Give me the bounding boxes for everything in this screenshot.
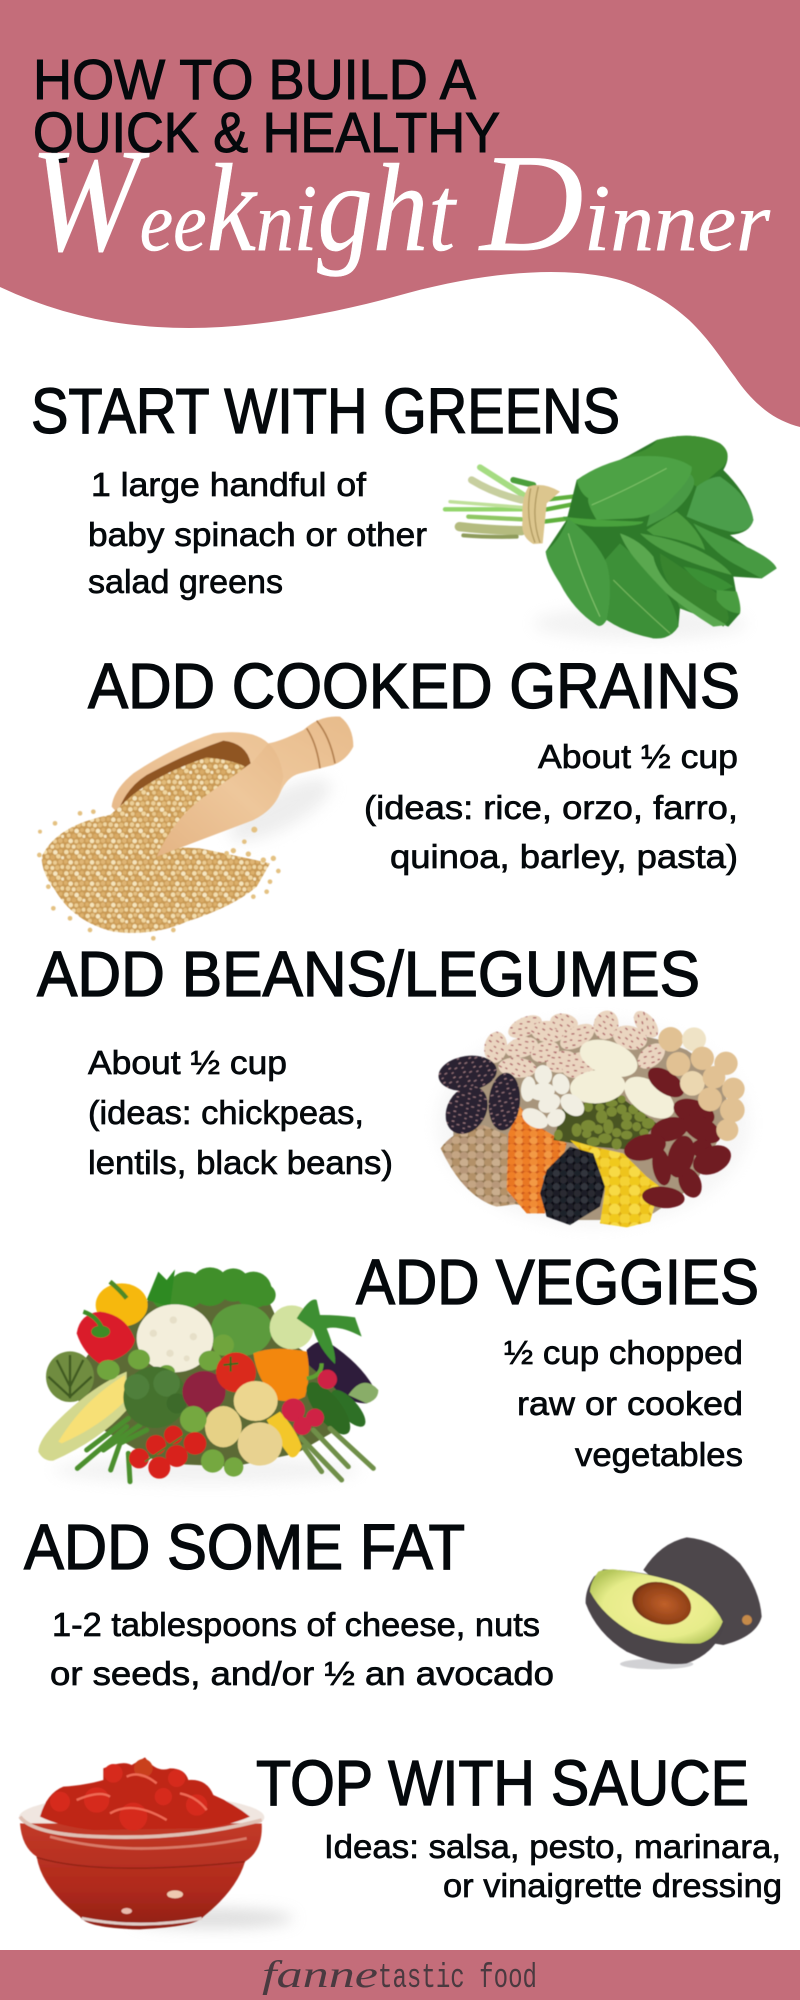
savoy cabbage bbox=[211, 1304, 272, 1356]
body text: (ideas: rice, orzo, farro, bbox=[364, 789, 738, 826]
kidney beans bbox=[621, 1061, 736, 1210]
body text: ½ cup chopped bbox=[504, 1334, 743, 1371]
sprouts foreground bbox=[180, 1406, 243, 1477]
title line 1: HOW TO BUILD A bbox=[33, 48, 476, 112]
yellow pepper bbox=[96, 1283, 148, 1327]
body text: baby spinach or other bbox=[88, 516, 427, 553]
twine bbox=[522, 485, 560, 544]
body text: (ideas: chickpeas, bbox=[88, 1094, 364, 1131]
icon: wooden scoop of quinoa bbox=[37, 716, 353, 941]
green beans bbox=[77, 1418, 147, 1482]
chickpeas bbox=[658, 1027, 745, 1141]
base underlayer bbox=[453, 1027, 730, 1220]
icon: pile of beans and lentils bbox=[436, 1007, 750, 1227]
asparagus bbox=[301, 1428, 373, 1480]
body text: or vinaigrette dressing bbox=[443, 1867, 782, 1904]
section: top with sauce bbox=[19, 1747, 782, 1929]
tomato bbox=[216, 1352, 256, 1392]
icon: pile of vegetables bbox=[38, 1267, 378, 1483]
body text: quinoa, barley, pasta) bbox=[390, 838, 738, 875]
body text bbox=[324, 1828, 782, 1904]
heading: TOP WITH SAUCE bbox=[256, 1747, 749, 1819]
header banner bbox=[0, 0, 800, 427]
black lentils bbox=[540, 1147, 605, 1225]
leaf underlayer bbox=[546, 436, 777, 638]
section: add beans and legumes bbox=[37, 938, 750, 1227]
body text bbox=[88, 1044, 393, 1181]
section: add cooked grains bbox=[37, 650, 740, 941]
body text: Ideas: salsa, pesto, marinara, bbox=[324, 1828, 781, 1865]
salsa lumps bbox=[50, 1759, 207, 1831]
section: add some fat bbox=[24, 1511, 762, 1692]
loose grains bbox=[37, 809, 281, 941]
body text: vegetables bbox=[575, 1436, 743, 1473]
corn bbox=[38, 1372, 127, 1461]
heading: ADD BEANS/LEGUMES bbox=[37, 938, 700, 1010]
body text: or seeds, and/or ½ an avocado bbox=[50, 1655, 554, 1692]
small white beans bbox=[519, 1064, 589, 1133]
potatoes bbox=[205, 1406, 242, 1447]
body text bbox=[364, 738, 738, 875]
heading: ADD SOME FAT bbox=[24, 1511, 465, 1583]
body text: raw or cooked bbox=[517, 1385, 743, 1422]
script title word 1: Weeknight bbox=[30, 119, 458, 283]
kohlrabi bbox=[270, 1305, 314, 1349]
broccoli bbox=[123, 1367, 187, 1428]
footer logo: tastic food bbox=[378, 1960, 537, 1998]
base underlayer bbox=[70, 1297, 353, 1467]
footer logo: fanne bbox=[262, 1954, 378, 1996]
red onion bbox=[182, 1371, 226, 1412]
body text bbox=[88, 466, 427, 600]
radishes bbox=[282, 1370, 337, 1435]
artichoke bbox=[46, 1351, 94, 1402]
body text bbox=[50, 1606, 554, 1692]
orange lentils bbox=[507, 1107, 567, 1213]
body text: salad greens bbox=[88, 563, 283, 600]
heading: ADD COOKED GRAINS bbox=[88, 650, 740, 722]
green mung beans bbox=[553, 1095, 657, 1150]
body text bbox=[504, 1334, 743, 1473]
icon: bowl of salsa bbox=[19, 1757, 293, 1929]
title bbox=[30, 48, 771, 283]
heading: ADD VEGGIES bbox=[356, 1246, 759, 1318]
brussels sprouts bbox=[97, 1334, 234, 1380]
icon: avocado bbox=[586, 1537, 762, 1669]
body text: About ½ cup bbox=[538, 738, 738, 775]
body text: 1-2 tablespoons of cheese, nuts bbox=[52, 1606, 540, 1643]
yellow squash bbox=[267, 1412, 302, 1457]
body text: About ½ cup bbox=[88, 1044, 287, 1081]
footer bar bbox=[0, 1950, 800, 2000]
cauliflower bbox=[137, 1304, 213, 1372]
yellow split peas bbox=[570, 1140, 660, 1227]
lettuce bbox=[147, 1267, 276, 1310]
pinto beans bbox=[482, 1007, 670, 1083]
orange pepper bbox=[253, 1349, 309, 1401]
cherry tomatoes bbox=[129, 1426, 206, 1479]
brown lentils bbox=[441, 1125, 523, 1207]
title line 2: QUICK & HEALTHY bbox=[33, 101, 500, 165]
large white beans bbox=[569, 1032, 682, 1127]
icon: spinach bunch bbox=[445, 436, 777, 640]
script title word 2: Dinner bbox=[478, 126, 771, 281]
body text: 1 large handful of bbox=[91, 466, 367, 503]
red pepper bbox=[77, 1312, 135, 1364]
section: start with greens bbox=[31, 375, 777, 640]
section: add veggies bbox=[38, 1246, 759, 1483]
dark speckled beans bbox=[436, 1052, 522, 1142]
cucumbers bbox=[326, 1385, 371, 1432]
body text: lentils, black beans) bbox=[88, 1144, 393, 1181]
heading: START WITH GREENS bbox=[31, 375, 620, 447]
eggplant bbox=[307, 1341, 376, 1403]
footer logo bbox=[262, 1954, 537, 1998]
